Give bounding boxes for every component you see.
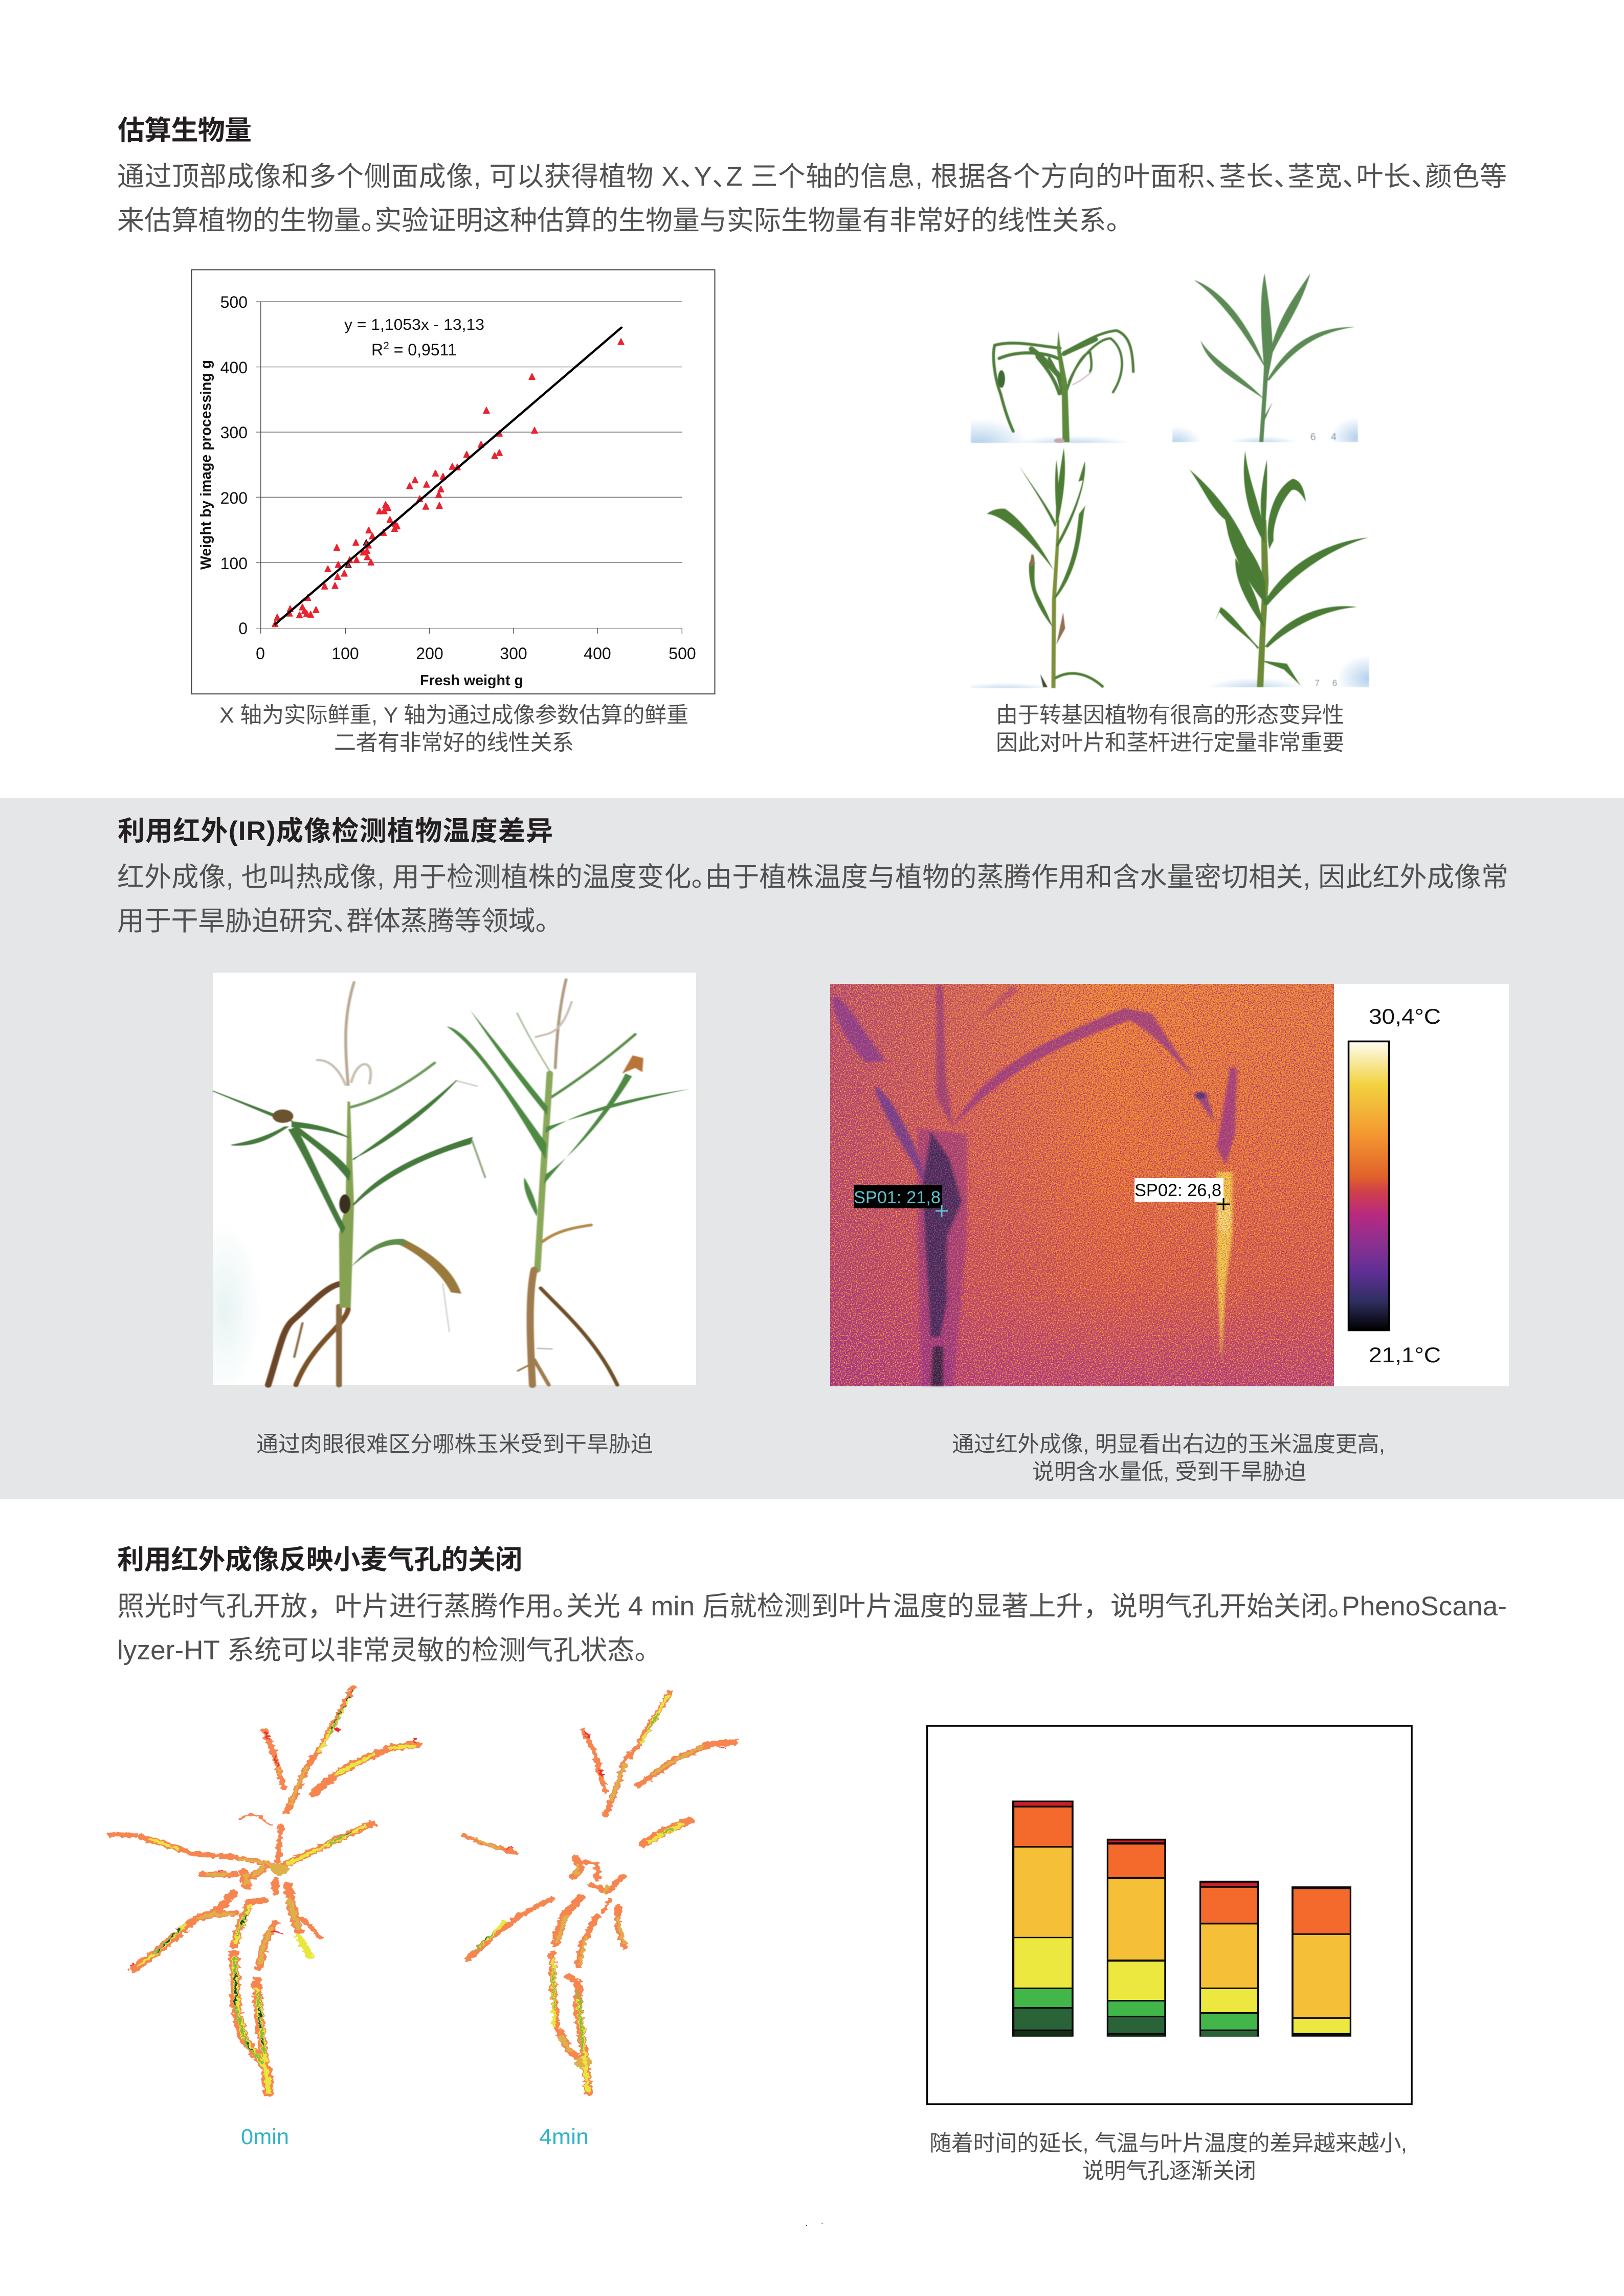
r squared: 2 [383,340,389,352]
plant top right: 6 [1310,431,1316,442]
spot label SP02: SP02: 26,8 [1134,1181,1221,1200]
section 3: stomata closure [110,1545,1507,2184]
caption: scatter chart: 二者有非常好的线性关系 [334,731,574,755]
left plant [268,982,485,1385]
thermal plants [832,985,1237,1386]
plant top right [1172,273,1359,443]
text block: infrared description: 用于干旱胁迫研究、群体蒸腾等领域。 [117,906,549,936]
x axis tick labels: 200 [416,644,443,663]
text block: infrared description [117,862,1508,936]
r squared: = 0,9511 [389,341,457,359]
bar 2 [1107,1839,1166,2037]
colour bar [1348,1041,1389,1331]
bar 3 [1199,1881,1259,2037]
panel: grey infrared section background [0,798,1624,1499]
caption: thermal image [952,1432,1385,1484]
thermal image [830,984,1334,1386]
y axis tick labels: 500 [220,293,248,311]
text block: stomata description: lyzer-HT 系统可以非常灵敏的检测气孔状态。 [117,1635,648,1665]
caption: thermal image: 说明含水量低, 受到干旱胁迫 [1032,1460,1306,1484]
spot label SP01 [854,1185,948,1217]
min temperature: 21,1°C [1369,1343,1441,1367]
caption: maize plants [996,703,1344,755]
section 2: infrared imaging [117,816,1509,1484]
caption: scatter chart [219,703,688,755]
text block: biomass description: 来估算植物的生物量。实验证明这种估算的生物量与实际生物量有非常好的线性关系。 [117,206,1120,236]
x axis tick labels: 300 [500,644,527,663]
bar 1 [1012,1800,1074,2037]
caption: bar chart: 说明气孔逐渐关闭 [1082,2159,1256,2184]
text block: stomata description [117,1591,1507,1665]
plant top left [970,328,1136,443]
text block: biomass description: 通过顶部成像和多个侧面成像, 可以获得植物 X、Y、Z 三个轴的信息, 根据各个方向的叶面积、茎长、茎宽、叶长、颜色等 [117,162,1507,192]
caption: maize plants: 因此对叶片和茎杆进行定量非常重要 [996,731,1344,755]
data points [272,339,624,627]
spot label SP01: SP01: 21,8 [854,1188,941,1207]
x axis tick labels [256,644,696,663]
section 1: biomass estimation [117,116,1507,755]
x axis tick labels: 400 [584,644,611,663]
y axis title: Weight by image processing g [198,360,214,570]
heading: biomass: 估算生物量 [118,116,252,146]
plant top right: 4 [1331,431,1337,442]
y axis tick labels: 300 [220,423,248,442]
regression equation: y = 1,1053x - 13,13 [344,316,484,333]
stacked bar chart [927,1726,1412,2104]
caption: plant photo: 通过肉眼很难区分哪株玉米受到干旱胁迫 [256,1432,653,1457]
x axis tick labels: 100 [331,644,359,663]
label: 4min: 4min [539,2125,589,2149]
text block: stomata description: 照光时气孔开放，叶片进行蒸腾作用。关光 4 min 后就检测到叶片温度的显著上升，说明气孔开始关闭。PhenoScana- [117,1591,1507,1622]
caption: maize plants: 由于转基因植物有很高的形态变异性 [996,703,1344,728]
plant bottom left [971,448,1105,688]
photo: four maize plants [970,273,1370,688]
r squared: R [371,341,383,359]
plant bottom right: 6 [1332,678,1337,688]
heading: stomata: 利用红外成像反映小麦气孔的关闭 [117,1545,522,1575]
plant bottom right: 7 [1315,678,1320,688]
caption: bar chart [929,2131,1407,2184]
y axis tick labels: 200 [220,489,248,507]
y axis tick labels: 0 [238,619,248,638]
bar 4 [1292,1886,1351,2037]
thermal silhouette: 0 min plant [110,1687,416,2094]
spot label SP02 [1134,1178,1230,1210]
photo: two drought-stressed maize plants [189,973,696,1396]
right plant [517,980,635,1385]
x axis tick labels: 500 [669,644,696,663]
x axis title: Fresh weight g [420,672,523,689]
thermal silhouette: 4 min plant [463,1693,735,2092]
label: 0min: 0min [241,2125,289,2149]
y axis tick labels: 100 [220,554,248,573]
regression line [274,327,622,625]
x axis tick labels: 0 [256,644,265,663]
caption: bar chart: 随着时间的延长, 气温与叶片温度的差异越来越小, [929,2131,1407,2156]
max temperature: 30,4°C [1369,1004,1441,1028]
heading: infrared imaging: 利用红外(IR)成像检测植物温度差异 [118,816,553,846]
y axis tick labels [220,293,248,638]
plant bottom right [1189,451,1370,688]
text block: infrared description: 红外成像, 也叫热成像, 用于检测植株的温度变化。由于植株温度与植物的蒸腾作用和含水量密切相关, 因此红外成像常 [117,862,1508,892]
caption: thermal image: 通过红外成像, 明显看出右边的玉米温度更高, [952,1432,1385,1457]
temperature scale panel [1334,984,1509,1386]
scatter chart: fresh weight vs image weight [191,270,715,694]
y axis tick labels: 400 [220,358,248,377]
caption: scatter chart: X 轴为实际鲜重, Y 轴为通过成像参数估算的鲜重 [219,703,688,728]
text block: biomass description [117,162,1507,236]
